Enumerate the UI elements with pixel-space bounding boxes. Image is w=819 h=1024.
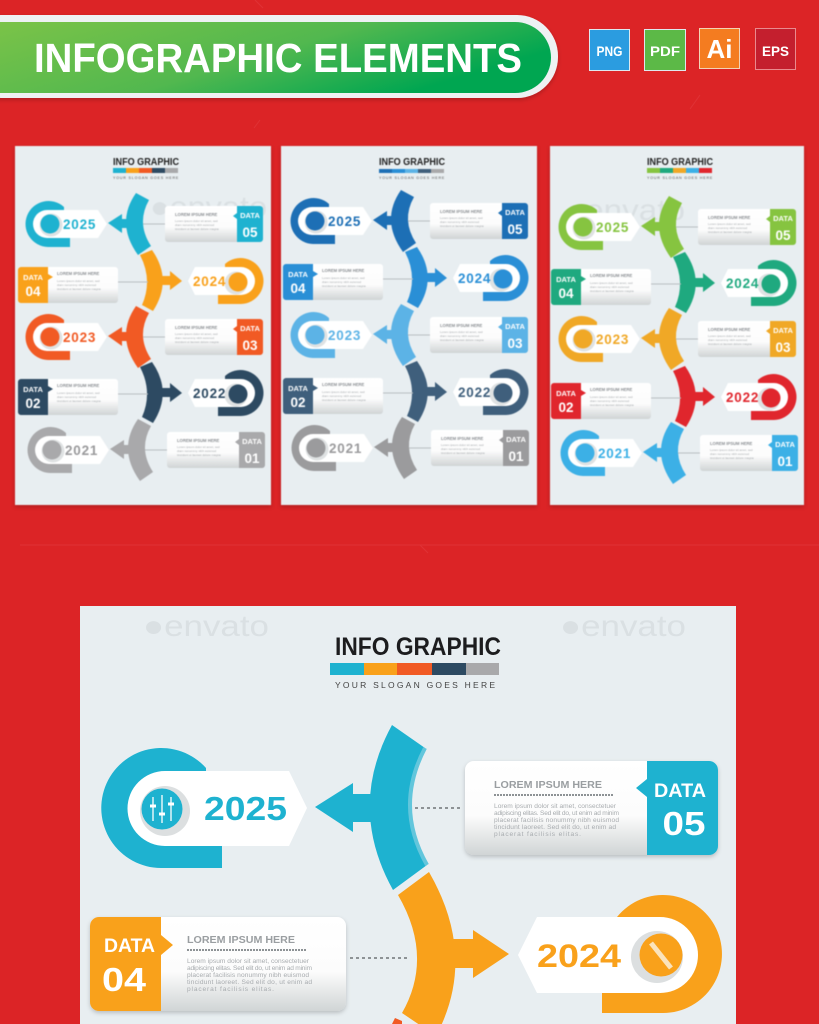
slogan: YOUR SLOGAN GOES HERE [647, 176, 713, 180]
row 2023: diam nonummy nibh euismod [175, 336, 215, 340]
row 2024 [18, 250, 263, 311]
row 2024: 2024 [458, 271, 491, 286]
card body: tincidunt laoreet. Sed elit do, ut enim ad [494, 824, 616, 831]
panel: preview 2 (blue) [281, 146, 537, 505]
connector [415, 807, 461, 809]
colour bar [330, 663, 499, 675]
row 2021: Lorem ipsum dolor sit amet, sed [441, 443, 484, 447]
row 2021: 01 [777, 454, 793, 469]
row 2021: tincidunt ut laoreet dolore magna [177, 453, 221, 457]
row 2023: tincidunt ut laoreet dolore magna [440, 338, 484, 342]
colour bar [379, 169, 444, 173]
row 2023: 2023 [596, 332, 629, 347]
row 2025: DATA [240, 211, 260, 220]
watermark right: ●envato [560, 610, 686, 643]
row 2021: diam nonummy nibh euismod [441, 447, 481, 451]
row 2025: 05 [242, 225, 258, 240]
slogan: YOUR SLOGAN GOES HERE [335, 680, 495, 690]
row 2024: Lorem ipsum dolor sit amet, sed [590, 281, 633, 285]
row 2025: 05 [507, 222, 523, 237]
row 2025: 2025 [596, 220, 629, 235]
row 2021: DATA [506, 435, 526, 444]
row 2025: DATA [505, 208, 525, 217]
row 2022: diam nonummy nibh euismod [322, 394, 362, 398]
card heading: LOREM IPSUM HERE [187, 934, 295, 946]
badge: PDF [644, 30, 686, 70]
row 2021 [28, 419, 265, 481]
arrow right [450, 930, 509, 978]
row 2025: diam nonummy nibh euismod [175, 223, 215, 227]
data number: 05 [662, 805, 706, 842]
row 2024: Lorem ipsum dolor sit amet, sed [57, 279, 100, 283]
row 2023: 2023 [63, 330, 96, 345]
data label: DATA [654, 781, 706, 802]
banner title: INFOGRAPHIC ELEMENTS [34, 35, 522, 81]
badge: PNG: PNG [596, 43, 623, 59]
row 2024: tincidunt ut laoreet dolore magna [322, 284, 366, 288]
row 2022: tincidunt ut laoreet dolore magna [57, 399, 101, 403]
row 2024: 04 [558, 286, 574, 301]
row 2021: 01 [244, 451, 260, 466]
data label: DATA [104, 936, 155, 957]
row 2025: tincidunt ut laoreet dolore magna [175, 227, 219, 231]
row 2025: 05 [775, 228, 791, 243]
row 2023: tincidunt ut laoreet dolore magna [175, 340, 219, 344]
mini title: INFO GRAPHIC [647, 156, 713, 168]
row 2024: tincidunt ut laoreet dolore magna [590, 289, 634, 293]
row 2022: diam nonummy nibh euismod [590, 399, 630, 403]
arrow left [315, 783, 375, 832]
card heading: LOREM IPSUM HERE [494, 779, 602, 791]
row 2021: DATA [775, 440, 795, 449]
row 2021: Lorem ipsum dolor sit amet, sed [177, 445, 220, 449]
row 2023: LOREM IPSUM HERE [440, 323, 483, 328]
row 2024 [283, 247, 528, 308]
badge: Ai: Ai [706, 34, 732, 64]
panel: preview 1 (multicolor) [15, 146, 271, 505]
badge: Ai [700, 28, 740, 68]
card body: tincidunt laoreet. Sed elit do, ut enim ad [187, 979, 312, 986]
row 2023: DATA [505, 322, 525, 331]
row 2023: 03 [775, 340, 791, 355]
row 2022 [283, 361, 528, 422]
row 2025 [26, 193, 263, 255]
row 2023: LOREM IPSUM HERE [708, 327, 751, 332]
row 2021: DATA [242, 437, 262, 446]
row 2024: Lorem ipsum dolor sit amet, sed [322, 276, 365, 280]
row 2021: tincidunt ut laoreet dolore magna [710, 456, 754, 460]
row 2025 [291, 190, 528, 252]
row 2022: Lorem ipsum dolor sit amet, sed [322, 390, 365, 394]
card body: adipiscing elitas. Sed elit do, ut enim ad minim [187, 965, 312, 972]
row 2024: 04 [290, 281, 306, 296]
watermark: ●envato [150, 191, 267, 224]
row 2024: tincidunt ut laoreet dolore magna [57, 287, 101, 291]
card body: placerat facilisis nonummy nibh euismod [187, 972, 309, 979]
row 2022 [551, 366, 796, 427]
row 2023: 03 [242, 338, 258, 353]
row 2022: LOREM IPSUM HERE [590, 387, 633, 392]
colour bar [647, 168, 712, 173]
row 2021: diam nonummy nibh euismod [710, 452, 750, 456]
row 2025: LOREM IPSUM HERE [175, 212, 218, 217]
connector [350, 957, 410, 959]
row 2025: 2025 [63, 217, 96, 232]
row 2024 [551, 252, 796, 313]
row 2024: 04 [25, 284, 41, 299]
badge: EPS [756, 28, 796, 70]
mini title: INFO GRAPHIC [379, 156, 445, 168]
row 2023 [559, 308, 796, 370]
row 2023: tincidunt ut laoreet dolore magna [708, 342, 752, 346]
row 2023: LOREM IPSUM HERE [175, 325, 218, 330]
row 2025 [559, 196, 796, 258]
badge: PDF: PDF [650, 43, 680, 59]
row 2022: 02 [558, 400, 574, 415]
row 2023 [26, 306, 263, 368]
icon: sliders [142, 788, 182, 830]
row 2024: DATA [23, 273, 43, 282]
row 2021: LOREM IPSUM HERE [441, 436, 484, 441]
row 2022: 02 [25, 396, 41, 411]
row 2021 [292, 417, 529, 479]
row 2021: Lorem ipsum dolor sit amet, sed [710, 448, 753, 452]
card body: placerat facilisis elitas. [494, 831, 581, 838]
row 2021 [561, 422, 798, 484]
year: 2024 [537, 938, 621, 974]
row 2021: diam nonummy nibh euismod [177, 449, 217, 453]
row 2025: Lorem ipsum dolor sit amet, sed [175, 219, 218, 223]
row 2025: Lorem ipsum dolor sit amet, sed [708, 222, 751, 226]
row 2024: 2024 [726, 276, 759, 291]
row 2022: DATA [288, 384, 308, 393]
panel: enlarged infographic [80, 606, 736, 1024]
row 2024: diam nonummy nibh euismod [322, 280, 362, 284]
row 2023: DATA [240, 324, 260, 333]
row 2022: 2022 [726, 390, 759, 405]
year: 2025 [204, 790, 287, 827]
slogan: YOUR SLOGAN GOES HERE [113, 176, 179, 180]
file format badges [590, 28, 796, 70]
header banner [0, 15, 558, 98]
row 2023: Lorem ipsum dolor sit amet, sed [708, 334, 751, 338]
card body: placerat facilisis nonummy nibh euismod [494, 817, 619, 824]
row 2023: 2023 [328, 328, 361, 343]
badge: EPS: EPS [762, 43, 789, 59]
row 2025: 2025 [328, 214, 361, 229]
row 2023: diam nonummy nibh euismod [440, 334, 480, 338]
row 2023: Lorem ipsum dolor sit amet, sed [440, 330, 483, 334]
row 2022 [18, 362, 263, 423]
data number: 04 [102, 961, 147, 998]
panel: preview 3 (green) [550, 146, 804, 505]
row 2022: diam nonummy nibh euismod [57, 395, 97, 399]
mini title: INFO GRAPHIC [113, 156, 179, 168]
row 2022: Lorem ipsum dolor sit amet, sed [590, 395, 633, 399]
year badge 2025 [101, 748, 307, 868]
card body: Lorem ipsum dolor sit amet, consectetuer [187, 958, 310, 965]
row 2025: DATA [773, 214, 793, 223]
row 2025: LOREM IPSUM HERE [440, 209, 483, 214]
row 2022: 2022 [458, 385, 491, 400]
row 2022: Lorem ipsum dolor sit amet, sed [57, 391, 100, 395]
row 2024: LOREM IPSUM HERE [590, 273, 633, 278]
row 2023 [291, 304, 528, 366]
row 2024: DATA [556, 275, 576, 284]
row 2024: LOREM IPSUM HERE [322, 268, 365, 273]
row 2024: diam nonummy nibh euismod [57, 283, 97, 287]
colour bar [113, 168, 178, 173]
row 2022: tincidunt ut laoreet dolore magna [322, 398, 366, 402]
row 2025: diam nonummy nibh euismod [440, 220, 480, 224]
row 2021: 2021 [329, 441, 362, 456]
card body: adipiscing elitas. Sed elit do, ut enim ad minim [494, 810, 620, 817]
row 2025: Lorem ipsum dolor sit amet, sed [440, 216, 483, 220]
row 2025: diam nonummy nibh euismod [708, 226, 748, 230]
row 2021: 2021 [65, 443, 98, 458]
row 2022: LOREM IPSUM HERE [322, 382, 365, 387]
row 2021: 2021 [598, 446, 631, 461]
row 2021: LOREM IPSUM HERE [177, 438, 220, 443]
title: INFO GRAPHIC [335, 633, 501, 661]
row 2022: DATA [556, 389, 576, 398]
watermark left: ●envato [143, 610, 269, 643]
row 2022: DATA [23, 385, 43, 394]
row 2022: LOREM IPSUM HERE [57, 383, 100, 388]
row 2021: 01 [508, 449, 524, 464]
watermark: ●envato [565, 194, 685, 227]
slogan: YOUR SLOGAN GOES HERE [379, 176, 445, 180]
row 2024: LOREM IPSUM HERE [57, 271, 100, 276]
row 2024: DATA [288, 270, 308, 279]
row 2025: LOREM IPSUM HERE [708, 215, 751, 220]
row 2022: tincidunt ut laoreet dolore magna [590, 403, 634, 407]
card body: Lorem ipsum dolor sit amet, consectetuer [494, 803, 617, 810]
row 2022: 2022 [193, 386, 226, 401]
row 2024: 2024 [193, 274, 226, 289]
badge: PNG [590, 30, 630, 70]
data card 05 [465, 761, 718, 855]
icon: pencil [640, 934, 682, 976]
year badge 2024 [518, 895, 722, 1013]
timeline segment: orange arc with arrow [398, 872, 509, 1024]
row 2023: diam nonummy nibh euismod [708, 338, 748, 342]
row 2025: tincidunt ut laoreet dolore magna [708, 230, 752, 234]
row 2023: DATA [773, 326, 793, 335]
card body: placerat facilisis elitas. [187, 986, 274, 993]
row 2025: tincidunt ut laoreet dolore magna [440, 224, 484, 228]
row 2024: diam nonummy nibh euismod [590, 285, 630, 289]
next segment tip [392, 1018, 402, 1024]
timeline segment: blue arc with arrow [315, 725, 427, 890]
row 2023: Lorem ipsum dolor sit amet, sed [175, 332, 218, 336]
row 2022: 02 [290, 395, 306, 410]
row 2021: LOREM IPSUM HERE [710, 441, 753, 446]
data card 04 [90, 917, 346, 1011]
row 2023: 03 [507, 336, 523, 351]
row 2021: tincidunt ut laoreet dolore magna [441, 451, 485, 455]
